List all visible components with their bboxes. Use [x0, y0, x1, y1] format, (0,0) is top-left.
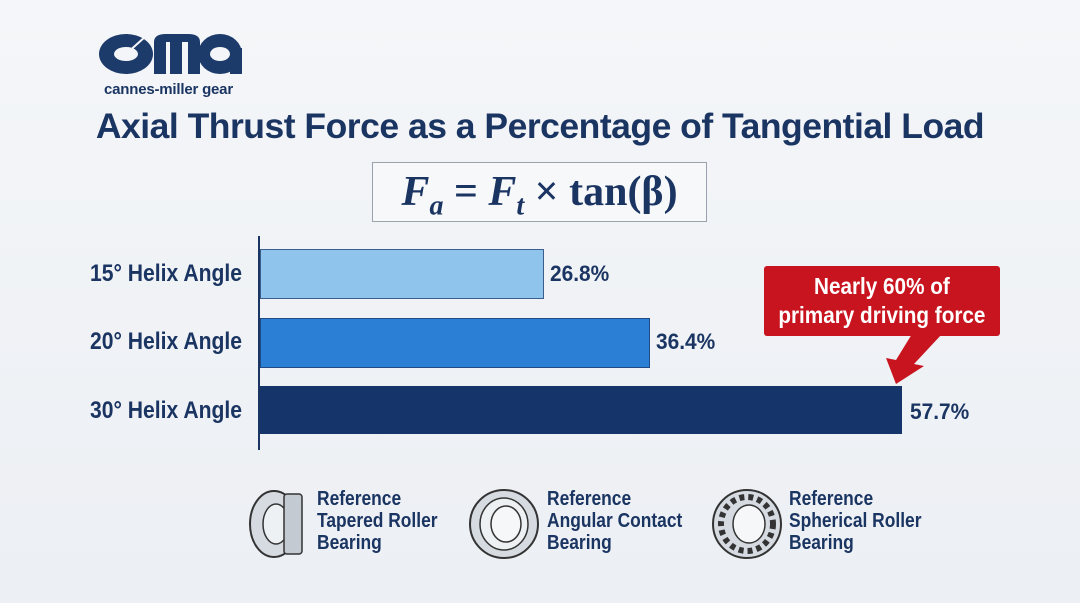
bearing: angular: Bearing [547, 532, 612, 554]
bar: 15 [90, 249, 609, 299]
bar: 15: 15° Helix Angle [90, 260, 242, 287]
bar: 30 [90, 386, 969, 434]
bar: 20: 36.4% [656, 329, 715, 354]
bearing: spherical: Reference [789, 488, 873, 510]
bearing: tapered [249, 488, 438, 558]
callout: primary driving force [778, 302, 985, 328]
callout [764, 266, 1000, 384]
bar: 15: 26.8% [550, 261, 609, 286]
bar: 30: 30° Helix Angle [90, 397, 242, 424]
bearing: spherical: Bearing [789, 532, 854, 554]
bar: 20 [90, 318, 715, 368]
logo: cannes-miller gear [104, 81, 233, 98]
bar: 30: 57.7% [910, 399, 969, 424]
bearing: spherical [712, 488, 922, 559]
bearing: angular: Angular Contact [547, 510, 682, 532]
bar: 20: 20° Helix Angle [90, 328, 242, 355]
bearing: tapered: Bearing [317, 532, 382, 554]
formula box: Fa = Ft × tan(β) [401, 169, 678, 221]
title: Axial Thrust Force as a Percentage of Tangential Load [96, 106, 984, 146]
bearing: spherical: Spherical Roller [789, 510, 921, 532]
bearing: angular: Reference [547, 488, 631, 510]
bar chart [90, 236, 969, 450]
bearing: tapered: Tapered Roller [317, 510, 438, 532]
logo [99, 34, 242, 98]
bearing: tapered: Reference [317, 488, 401, 510]
callout: Nearly 60% of [814, 273, 950, 299]
bearing: angular [469, 488, 682, 559]
